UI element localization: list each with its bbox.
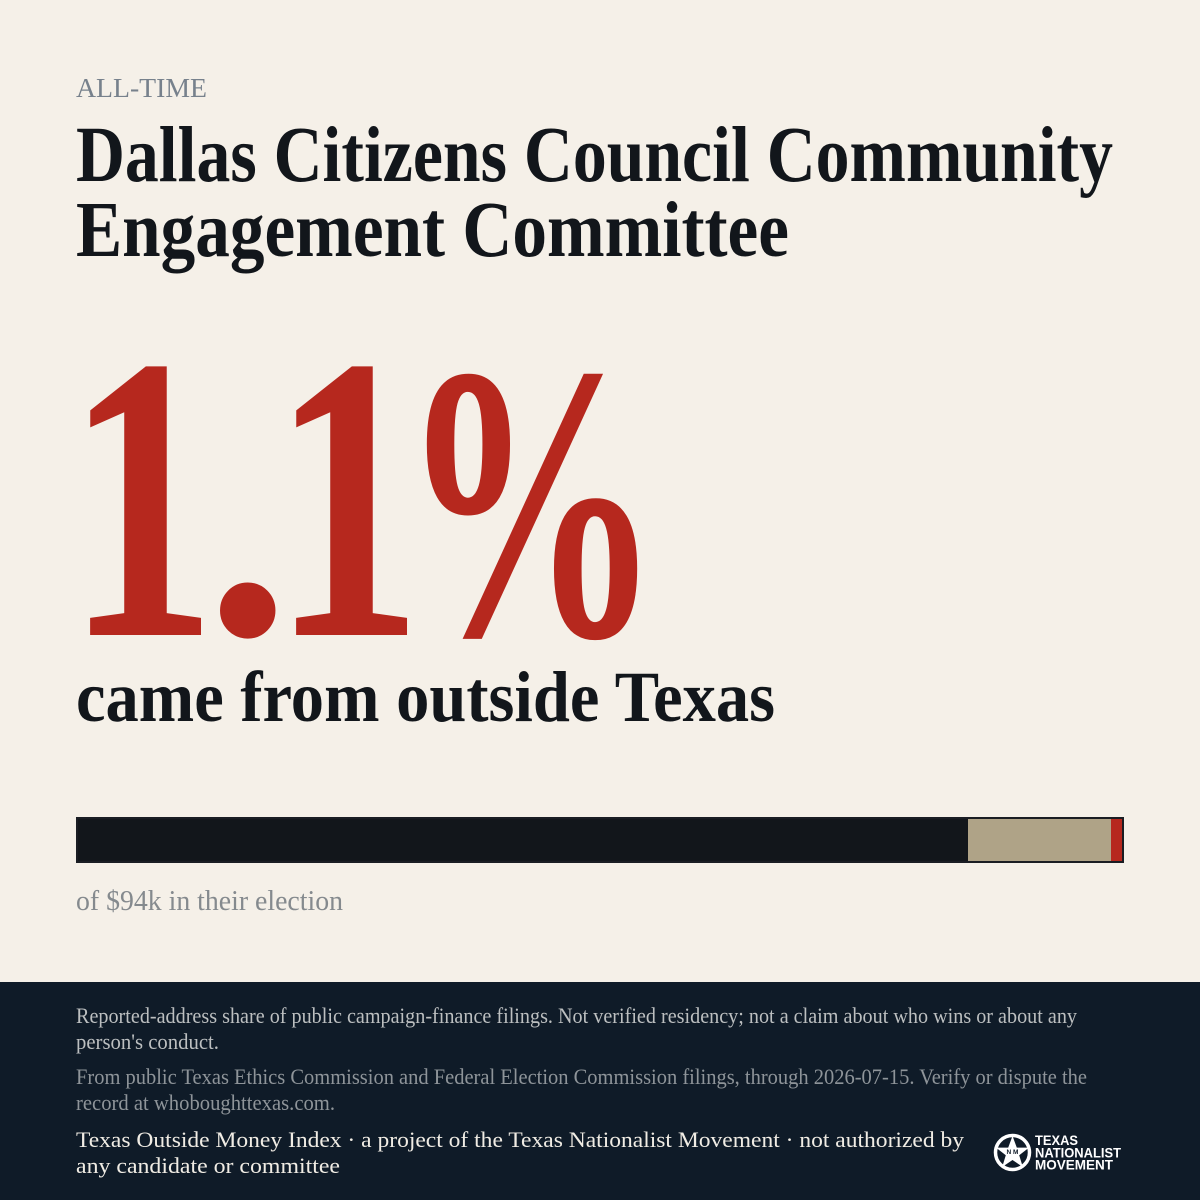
logo wordmark: TEXAS: [1035, 1133, 1078, 1148]
big percentage: [66, 273, 662, 724]
big percentage: .: [205, 327, 290, 709]
attribution text: Texas Outside Money Index · a project of the Texas Nationalist Movement · not authorized by: [76, 1127, 964, 1152]
footer panel: [0, 982, 1200, 1200]
source text: From public Texas Ethics Commission and Federal Election Commission filings, through 2026-07-15. Verify or dispute the: [76, 1064, 1087, 1089]
source text: record at whoboughttexas.com.: [76, 1090, 335, 1115]
stacked bar: [76, 817, 1124, 863]
source text: [76, 1064, 1087, 1115]
attribution text: [76, 1127, 964, 1178]
logo: Texas Nationalist Movement: [996, 1133, 1122, 1172]
disclaimer text: [76, 1003, 1077, 1054]
title: Engagement Committee: [76, 187, 789, 274]
title: [76, 112, 1113, 274]
big percentage: 1: [272, 273, 423, 724]
icon: star in ring: N M: [1007, 1149, 1018, 1156]
subheading: came from outside Texas: [76, 657, 775, 737]
bar caption: of $94k in their election: [76, 885, 343, 917]
attribution text: any candidate or committee: [76, 1153, 340, 1178]
disclaimer text: Reported-address share of public campaign-finance filings. Not verified residency; not a claim about who wins or about any: [76, 1003, 1077, 1028]
logo wordmark: [1035, 1133, 1122, 1172]
big percentage: %: [400, 287, 662, 721]
big percentage: 1: [66, 273, 217, 724]
eyebrow: all-time: ALL-TIME: [76, 73, 207, 103]
disclaimer text: person's conduct.: [76, 1029, 219, 1054]
logo wordmark: MOVEMENT: [1035, 1158, 1114, 1172]
logo wordmark: NATIONALIST: [1035, 1146, 1122, 1160]
